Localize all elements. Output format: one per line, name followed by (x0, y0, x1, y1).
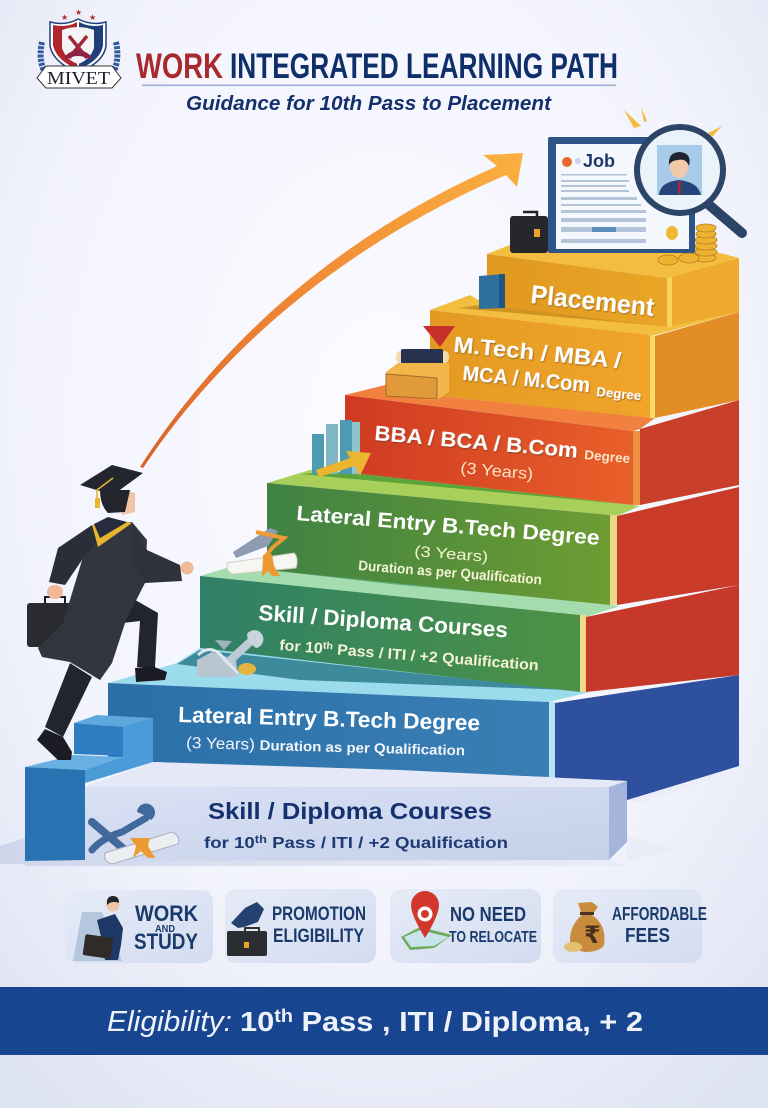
step 3: skill diploma green: Pass / ITI / +2 Qualification (332, 641, 539, 674)
chip: promotion eligibility: PROMOTION (272, 904, 366, 925)
chip: work and study: AND (155, 924, 175, 935)
growth arrow (140, 153, 523, 468)
icon: bar chart with arrow on step 4 (312, 420, 371, 477)
hands (47, 562, 194, 599)
chip: work and study: WORK (135, 901, 198, 926)
icon: briefcase (510, 212, 548, 253)
graduate figure (27, 465, 194, 760)
gold hood (92, 522, 132, 547)
head (100, 490, 135, 515)
back leg (45, 663, 92, 737)
icon: blue binder on step 6 (479, 274, 505, 309)
chip: work and study (65, 890, 213, 963)
step 4: lateral entry green: Lateral Entry B.Tech Degree (296, 502, 600, 550)
step 7: placement (487, 243, 739, 327)
right arm (132, 523, 182, 583)
step 2: lateral entry blue: Lateral Entry B.Tech Degree (178, 702, 480, 735)
chip: work and study: STUDY (134, 929, 198, 954)
icon: books and box on step 5 (386, 326, 455, 400)
logo: MIVET crest: ★ (89, 13, 96, 22)
step 4: lateral entry green (267, 470, 739, 605)
back shoe (37, 729, 72, 760)
eligibility band: Eligibility: (107, 1006, 232, 1038)
chip: promotion eligibility (225, 889, 376, 963)
eligibility band (0, 987, 768, 1055)
icon: wrench and nut on step 2 (197, 630, 263, 677)
icon: scroll and tools on step 3 (227, 528, 297, 577)
step 6: masters: MCA / M.Com (462, 362, 591, 397)
logo: MIVET crest: MIVET (47, 68, 110, 88)
step 2: lateral entry blue: (3 Years) Duration as per Qualification (186, 735, 465, 759)
step 1: skill diploma: Skill / Diploma Courses (208, 798, 492, 824)
small blue stairs (25, 715, 153, 861)
logo: MIVET crest: ★ (61, 13, 68, 22)
chip: no need to relocate: NO NEED (450, 904, 526, 926)
step 4: lateral entry green: (3 Years) (414, 543, 489, 566)
title underline (142, 84, 616, 86)
step 6: masters: Degree (596, 384, 642, 403)
left arm (49, 525, 98, 585)
subtitle: Guidance for 10th Pass to Placement (186, 93, 552, 115)
step 1: skill diploma (85, 762, 627, 861)
eligibility band: 10 (240, 1006, 271, 1037)
title (136, 47, 618, 86)
icon: tools and scroll on step 1 (92, 804, 179, 864)
chip: affordable fees: FEES (625, 925, 670, 947)
step 6: masters (430, 295, 739, 418)
step 6: masters: M.Tech / MBA / (453, 332, 622, 373)
title: INTEGRATED LEARNING PATH (230, 47, 618, 86)
step 3: skill diploma green: th (323, 640, 333, 652)
step 7: placement: Placement (529, 279, 656, 322)
step 1: skill diploma: th (255, 834, 267, 846)
mortarboard (80, 465, 143, 508)
step 1: skill diploma: for 10 (204, 835, 248, 852)
logo: MIVET crest: ★ (75, 8, 82, 17)
step 5: bba bca: (3 Years) (460, 460, 534, 483)
step 5: bba bca (345, 385, 739, 505)
step 5: bba bca: Degree (584, 447, 631, 466)
job document: Job (583, 151, 615, 171)
step 1: skill diploma: Pass / ITI / +2 Qualification (267, 835, 508, 852)
chip: affordable fees (553, 889, 707, 963)
job document (548, 137, 695, 253)
front leg (122, 597, 158, 667)
title: WORK (136, 47, 223, 86)
step 3: skill diploma green: Skill / Diploma Courses (258, 600, 509, 642)
step 3: skill diploma green (200, 566, 739, 692)
briefcase (27, 597, 75, 647)
ground shadows (0, 766, 755, 866)
step 2: lateral entry blue (108, 648, 739, 800)
step 3: skill diploma green: for 10 (279, 637, 321, 657)
icon: coins (658, 224, 717, 265)
chip: promotion eligibility: ELIGIBILITY (273, 926, 364, 947)
chip: no need to relocate (390, 889, 541, 963)
logo: MIVET crest (37, 8, 121, 88)
gown (38, 522, 147, 680)
step 5: bba bca: BBA / BCA / B.Com (374, 422, 579, 463)
eligibility band: Pass , ITI / Diploma, + 2 (293, 1006, 643, 1037)
icon: magnifier with person (624, 107, 742, 233)
step 4: lateral entry green: Duration as per Qualification (358, 557, 542, 587)
chip: affordable fees: AFFORDABLE (612, 904, 707, 924)
chip: no need to relocate: TO RELOCATE (449, 929, 537, 946)
chip: affordable fees: ₹ (584, 921, 601, 949)
front shoe (135, 666, 167, 682)
eligibility band: th (274, 1006, 293, 1026)
